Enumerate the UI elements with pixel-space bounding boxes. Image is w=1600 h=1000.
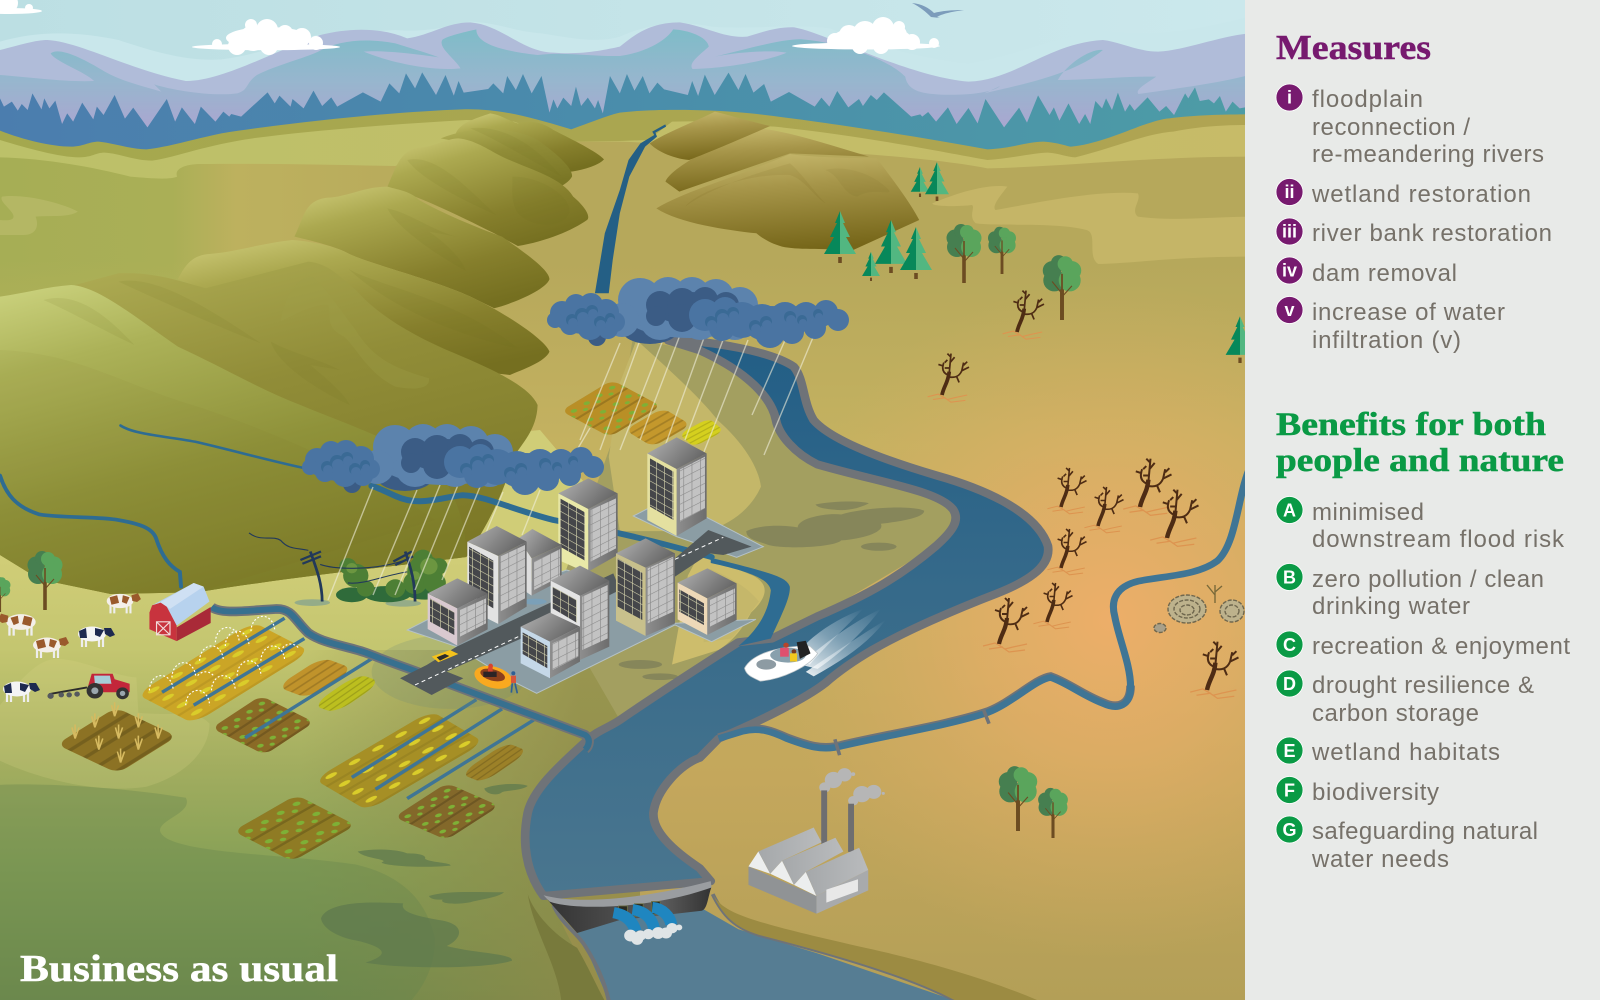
item D: D (1283, 674, 1296, 694)
item C: recreation & enjoyment (1312, 633, 1570, 660)
main river (525, 340, 1048, 1000)
item C: C (1283, 635, 1296, 655)
field: brown right (394, 783, 499, 840)
waterfall stream (595, 124, 666, 293)
item iv: dam removal (1312, 260, 1457, 287)
speedboat (745, 609, 886, 681)
building: small behind (518, 529, 562, 596)
building: white tall left (467, 526, 527, 624)
rescuer (511, 671, 517, 693)
heading: benefits: people and nature (1276, 443, 1564, 479)
mountains (0, 17, 1249, 133)
item v: v (1284, 300, 1295, 320)
item iii: iii (1282, 222, 1297, 242)
building: white mid (551, 566, 609, 660)
field: brown with seedlings (211, 696, 314, 755)
building: peach small (678, 568, 737, 635)
puddle (523, 599, 547, 605)
centre tributary (372, 486, 712, 557)
field: sprinkler crop (136, 622, 310, 724)
item ii: wetland restoration (1311, 181, 1531, 208)
item B: zero pollution / clean (1312, 566, 1544, 593)
car (432, 650, 458, 662)
item iv: iv (1282, 260, 1297, 280)
dry crop tufts (72, 702, 162, 763)
item E: wetland habitats (1311, 739, 1500, 766)
scene title: Business as usual (20, 948, 338, 990)
heading: benefits: Benefits for both (1276, 407, 1546, 443)
fields and farm (47, 583, 589, 967)
field: yellow green strips (312, 674, 381, 713)
building: blue small (521, 613, 580, 678)
left tributary (0, 476, 181, 587)
hull (745, 646, 818, 681)
sprinklers (149, 616, 298, 705)
item ii: ii (1284, 182, 1295, 202)
item i: reconnection / (1312, 114, 1470, 141)
item B (1276, 564, 1544, 620)
white clouds (0, 0, 940, 55)
building: tan tall (616, 538, 675, 636)
item B: B (1283, 568, 1296, 588)
item A: A (1283, 500, 1296, 520)
canal water (211, 607, 589, 750)
field: dry crop (57, 707, 177, 773)
ground shadow blobs (321, 784, 528, 967)
item G (1276, 816, 1538, 873)
sky (0, 0, 1245, 220)
item F: biodiversity (1312, 779, 1439, 806)
canal from barn (211, 607, 589, 750)
storm cloud lower (302, 424, 604, 495)
forest tree line (0, 72, 1249, 200)
flood halo around crossing (372, 635, 530, 709)
city (400, 437, 763, 695)
panel: legend (1245, 0, 1600, 1000)
field: ochre strips (277, 657, 354, 699)
heading: measures: Measures (1276, 28, 1431, 67)
item G: water needs (1311, 846, 1449, 873)
item G: G (1282, 820, 1297, 840)
left hills (0, 113, 604, 594)
trees (0, 162, 1254, 838)
rain lines (328, 335, 814, 600)
thin hill tributary (121, 426, 308, 469)
item i: floodplain (1312, 86, 1423, 113)
storm cloud upper (547, 277, 849, 348)
item v: infiltration (v) (1312, 327, 1461, 354)
field: olive lower (233, 795, 356, 862)
field: large olive (314, 711, 484, 811)
item i: re-meandering rivers (1312, 141, 1544, 168)
smoke (819, 768, 885, 806)
field: small strips (461, 742, 529, 783)
factory (748, 768, 885, 914)
tributaries (0, 426, 712, 587)
upper fields (561, 380, 724, 447)
dam (544, 881, 712, 945)
scene: landscape (0, 0, 1254, 1000)
tractor and plough (47, 674, 130, 699)
plazas (407, 508, 763, 693)
power lines and poles (249, 533, 447, 607)
item v (1276, 296, 1505, 354)
list: measures (1276, 84, 1552, 354)
foam (624, 923, 682, 945)
item v: increase of water (1312, 299, 1505, 326)
heading: benefits (1276, 407, 1564, 479)
road (400, 530, 752, 695)
rescue raft (472, 662, 515, 693)
item F: F (1284, 780, 1295, 800)
item A: minimised (1312, 499, 1424, 526)
small hills upper centre (650, 112, 919, 250)
water jets (614, 907, 671, 931)
item iii: river bank restoration (1312, 220, 1552, 247)
barn (149, 583, 211, 641)
item G: safeguarding natural (1312, 818, 1538, 845)
peninsula land (553, 340, 961, 720)
item D: drought resilience & (1312, 672, 1534, 699)
item i: i (1287, 88, 1292, 108)
building: pink small (428, 578, 488, 646)
bird (912, 3, 964, 18)
wake (794, 609, 886, 676)
cows (0, 593, 141, 702)
item i (1276, 84, 1544, 168)
item D: carbon storage (1312, 700, 1479, 727)
list: benefits (1276, 496, 1570, 873)
building: yellow tall centre (558, 478, 618, 573)
item A: downstream flood risk (1312, 526, 1565, 553)
bushes (336, 550, 447, 602)
lower land (0, 430, 700, 1000)
building: yellow tall back (647, 437, 707, 536)
irrigation pipes (162, 618, 534, 799)
item B: drinking water (1312, 593, 1470, 620)
terrain bands and ground (0, 109, 1252, 1000)
item D (1276, 670, 1534, 727)
item E: E (1283, 741, 1296, 761)
item A (1276, 496, 1565, 553)
tumbleweeds (1154, 585, 1244, 632)
right tributary (719, 464, 1251, 755)
dead trees (928, 291, 1238, 698)
